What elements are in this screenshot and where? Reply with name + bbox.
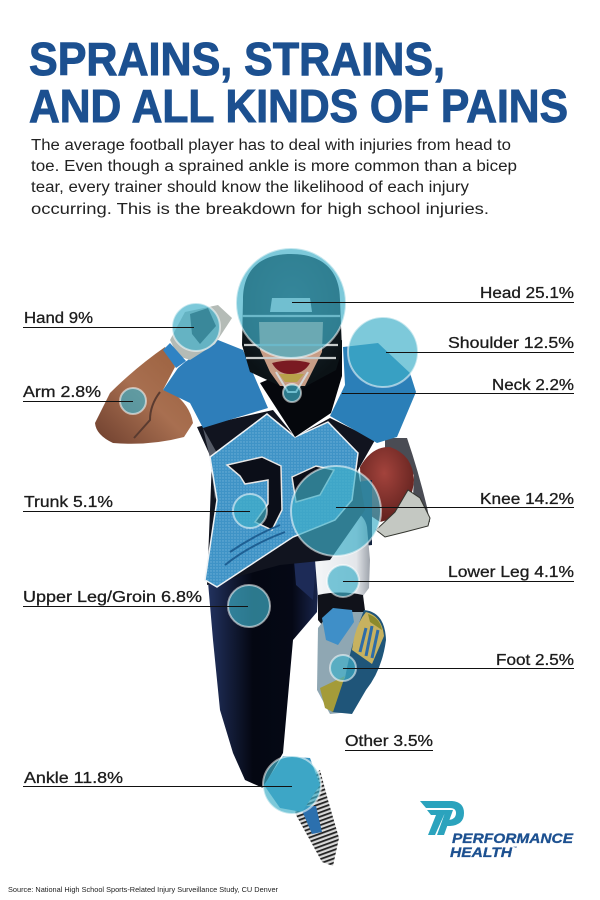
label: knee: Knee 14.2% [480,491,574,508]
white leg sleeve [315,510,370,598]
leader lines [23,302,574,786]
circle: trunk [233,494,267,528]
intro text: toe. Even though a sprained ankle is more common than a bicep [31,158,517,175]
label: neck: Neck 2.2% [492,377,574,394]
label: head: Head 25.1% [480,285,574,302]
logo: Performance Health [420,801,574,860]
logo: Performance Health: HEALTH [450,844,513,860]
label: ankle: Ankle 11.8% [24,770,123,787]
circle: knee [291,466,381,556]
football [360,447,414,522]
planted shoe [264,756,339,866]
circle: hand [172,303,220,351]
label: trunk: Trunk 5.1% [24,494,113,511]
arm [95,347,193,444]
circle: ankle [263,756,321,814]
neck guard [260,340,342,437]
intro text: occurring. This is the breakdown for high school injuries. [31,201,489,218]
circle: head [236,248,346,358]
label: other: Other 3.5% [345,733,433,750]
label: upper leg: Upper Leg/Groin 6.8% [23,589,202,606]
raised glove and wristband [163,305,232,368]
jersey torso [205,414,358,587]
source note: Source: National High School Sports-Related Injury Surveillance Study, CU Denver [8,885,278,894]
football player illustration [95,254,430,866]
circle: shoulder [348,317,418,387]
raised thigh [296,480,372,552]
logo: Performance Health: PERFORMANCE [452,830,574,846]
title: SPRAINS, STRAINS, [29,33,445,85]
injury circles [120,248,418,814]
label: shoulder: Shoulder 12.5% [448,335,574,352]
circle: foot [330,655,356,681]
black sock [318,592,366,632]
circle: arm [120,388,146,414]
intro text: The average football player has to deal with injuries from head to [31,137,511,154]
logo mark [420,801,464,835]
title [29,33,568,132]
logo: Performance Health: ™ [513,845,517,850]
jersey sleeves [163,340,416,443]
raised shoe [317,608,386,714]
intro text: tear, every trainer should know the likelihood of each injury [31,179,469,196]
helmet [242,254,342,392]
thigh shading [292,537,317,600]
right glove [376,490,430,537]
label: arm: Arm 2.8% [23,384,101,401]
title: AND ALL KINDS OF PAINS [29,80,568,132]
label: hand: Hand 9% [24,310,93,327]
right forearm [385,438,430,522]
circle: upper leg [228,585,270,627]
arm crease [134,392,160,438]
circle: lower leg [327,565,359,597]
circle: neck [283,384,301,402]
intro text [31,137,517,218]
dark jersey panels [197,410,375,585]
label: lower leg: Lower Leg 4.1% [448,564,574,581]
label: foot: Foot 2.5% [496,652,574,669]
pants [208,540,320,788]
